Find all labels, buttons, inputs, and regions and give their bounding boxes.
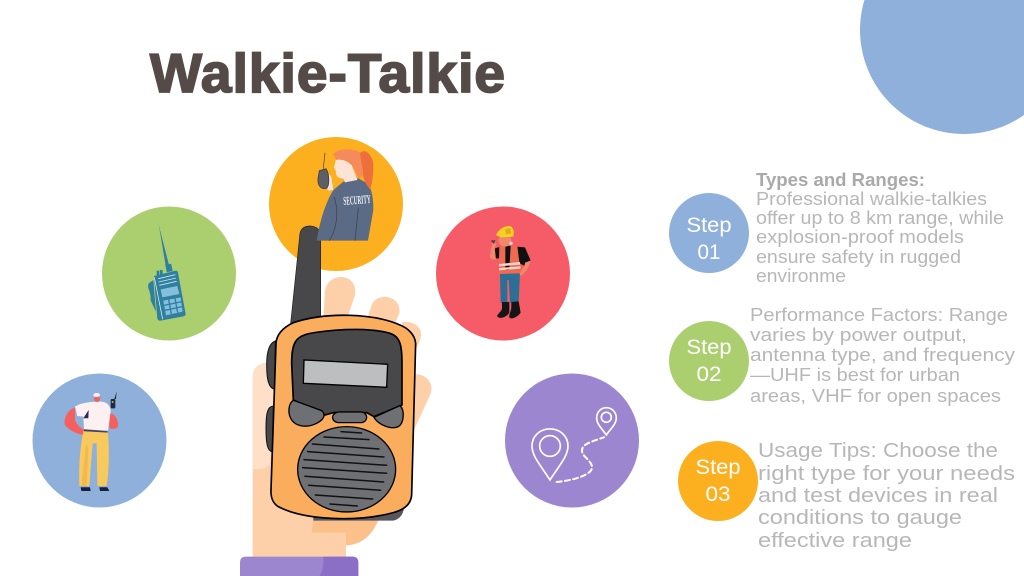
illustration: hand holding walkie-talkie (240, 149, 431, 576)
step 01 text (756, 169, 1004, 286)
icon: handheld radio (148, 222, 186, 321)
step 02 text: varies by power output, (750, 324, 967, 345)
step 03 text (758, 439, 1015, 552)
speaker grille (298, 427, 396, 512)
step 02 text (750, 304, 1016, 406)
circle: construction worker (436, 206, 570, 340)
title: Walkie-Talkie (150, 42, 505, 104)
figure: man in yellow trousers (65, 391, 118, 491)
circle: worker with radio (32, 374, 166, 508)
illustration: hand holding walkie-talkie: SECURITY (343, 192, 371, 208)
hand (253, 277, 431, 557)
step 03 label: Step (696, 456, 740, 479)
step 01 text: Types and Ranges: (756, 169, 925, 190)
step 02: 02 (696, 363, 722, 386)
step 03 text: and test devices in real (758, 484, 998, 507)
step 03 text: conditions to gauge (758, 506, 962, 529)
figure: security guard (317, 149, 373, 241)
cuff (240, 557, 358, 576)
step 02 text: antenna type, and frequency (750, 344, 1016, 365)
step 03 text: Usage Tips: Choose the (758, 439, 998, 462)
step 03 text: effective range (758, 529, 912, 552)
step 01 text: ensure safety in rugged (756, 246, 961, 267)
step 03 text: right type for your needs (758, 462, 1015, 485)
walkie-talkie (266, 226, 416, 521)
circle: security guard background (269, 137, 403, 271)
circle: route map (505, 374, 639, 508)
step 01 text: environme (756, 265, 846, 286)
step 03 (678, 441, 758, 521)
step 01: 01 (698, 241, 720, 264)
figure: construction worker (490, 226, 531, 318)
step 02 text: areas, VHF for open spaces (750, 385, 1001, 406)
step 03: 03 (706, 483, 730, 506)
step 02 text: —UHF is best for urban (750, 364, 960, 385)
step 02 (669, 321, 749, 401)
step 02 text: Performance Factors: Range (750, 304, 1008, 325)
step 01 text: offer up to 8 km range, while (756, 207, 1004, 228)
step 02 label: Step (686, 336, 732, 359)
icon: route pins and dashed path (532, 408, 616, 482)
step 01 text: explosion-proof models (756, 226, 964, 247)
step 01 label: Step (686, 214, 732, 237)
step 01 text: Professional walkie-talkies (756, 188, 987, 209)
circle: handheld radio (102, 206, 236, 340)
step 01 (669, 193, 749, 273)
decorative corner circle (860, 0, 1024, 134)
